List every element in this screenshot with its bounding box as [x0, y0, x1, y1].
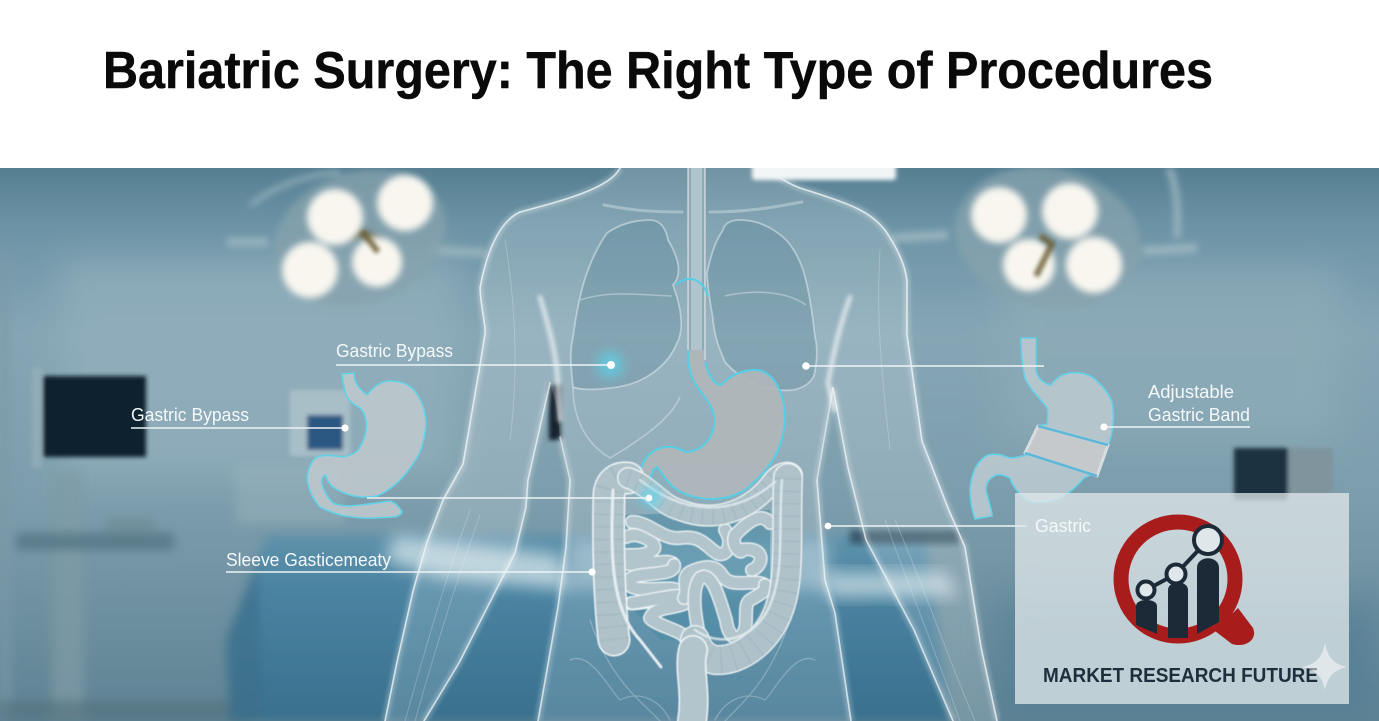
surgical light left — [226, 168, 488, 302]
logo: Market Research Future — [1043, 522, 1318, 687]
dark monitor sliver behind torso — [549, 385, 561, 440]
operating room background — [0, 148, 1379, 721]
gastric band — [1025, 426, 1108, 476]
pelvis — [570, 620, 815, 721]
magnifier ring — [1121, 522, 1235, 636]
central stomach and esophagus — [639, 168, 785, 499]
arm bones — [405, 510, 975, 721]
taenia lines — [612, 490, 661, 667]
outer contour — [385, 168, 620, 721]
callout labels: Gastric Band — [1148, 405, 1250, 425]
ceiling light — [749, 168, 900, 184]
monitor right — [1234, 448, 1333, 500]
callout labels: Gastric Bypass — [131, 405, 249, 425]
surgical light right — [890, 168, 1199, 298]
small intestine — [622, 518, 770, 640]
chart bars — [1136, 558, 1219, 638]
logo wordmark: MARKET RESEARCH FUTURE — [1043, 665, 1318, 687]
callout labels: Adjustable — [1148, 382, 1234, 402]
callout labels: Gastric Bypass — [336, 341, 453, 361]
collarbones — [604, 205, 682, 212]
left stomach illustration — [307, 373, 426, 518]
sparkle — [1302, 643, 1347, 690]
right stomach illustration with adjustable band — [970, 338, 1113, 519]
ascending colon — [609, 478, 628, 640]
soft contour glow — [385, 168, 997, 721]
lungs — [571, 220, 817, 458]
human body silhouette — [385, 168, 997, 721]
sheet highlights — [385, 535, 570, 590]
cyan arc over esophagus — [676, 279, 708, 296]
intestines — [609, 473, 792, 721]
dark band behind right arm — [850, 530, 960, 544]
header band — [0, 0, 1379, 168]
descending colon — [695, 478, 788, 660]
monitor left — [32, 368, 146, 468]
liver and lobe lines — [573, 292, 806, 458]
rectum — [691, 650, 694, 721]
callout lines and dots — [131, 352, 1250, 576]
callout labels: Sleeve Gasticemeaty — [226, 550, 391, 570]
callout labels — [131, 341, 1250, 570]
torso and shoulders fill — [385, 168, 997, 721]
title: Bariatric Surgery: The Right Type of Procedures — [103, 42, 1213, 100]
transverse colon — [628, 473, 792, 516]
monitor stand and equipment left — [0, 476, 229, 720]
arm and torso sides — [424, 383, 550, 721]
vital signs monitor — [290, 390, 350, 456]
chart connector — [1146, 540, 1208, 590]
floor right — [1000, 600, 1379, 721]
operating table — [226, 535, 950, 721]
logo panel — [1015, 493, 1349, 704]
large intestine — [609, 473, 792, 721]
chart nodes — [1138, 526, 1222, 598]
armpit highlights — [540, 297, 850, 420]
magnifier handle — [1215, 608, 1254, 645]
callout labels: Gastric — [1035, 516, 1091, 536]
